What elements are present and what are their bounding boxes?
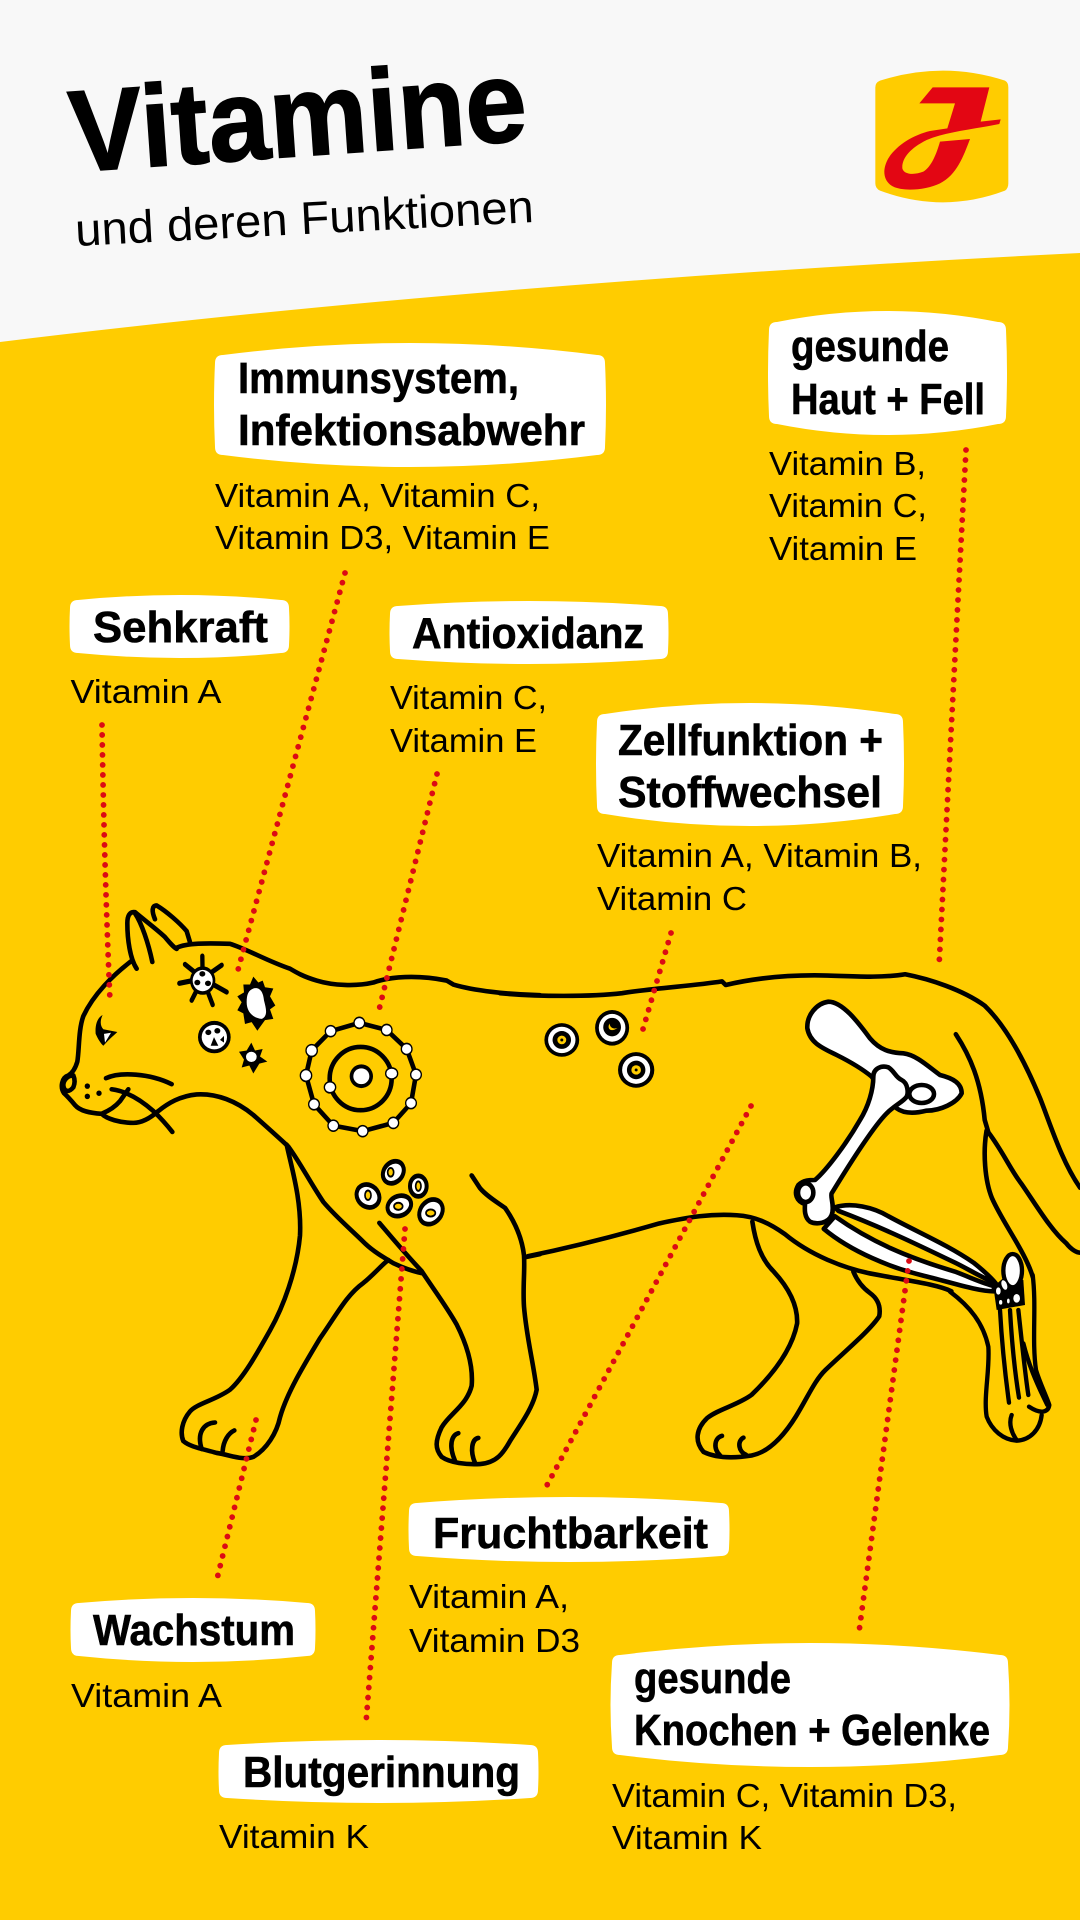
label: gesunde Haut + Fell	[768, 311, 1007, 435]
icon: lower leg bones	[824, 1205, 996, 1291]
label: Wachstum: Wachstum	[93, 1606, 295, 1655]
label: Fruchtbarkeit	[408, 1497, 730, 1562]
title: Vitamine	[65, 35, 531, 197]
icon: virus and bacteria	[179, 956, 275, 1073]
cat eye and whisker dots	[85, 1015, 117, 1099]
label: gesunde Knochen + Gelenke: gesunde	[634, 1654, 791, 1703]
label: Blutgerinnung: Blutgerinnung	[243, 1748, 520, 1797]
dotted connector lines	[102, 450, 966, 1723]
text: Zellfunktion vitamins: Vitamin C	[597, 880, 747, 917]
text: Haut vitamins	[769, 445, 927, 567]
cat illustration	[62, 905, 1080, 1464]
text: Antioxidanz vitamins: Vitamin C,	[390, 679, 547, 716]
icon: foot and paw	[950, 1254, 1049, 1441]
text: Fruchtbarkeit vitamins: Vitamin D3	[409, 1622, 580, 1659]
text: Knochen vitamins: Vitamin K	[612, 1819, 762, 1856]
label: gesunde Knochen + Gelenke	[610, 1643, 1010, 1767]
label: gesunde Haut + Fell: Haut + Fell	[791, 375, 985, 424]
text: Immunsystem vitamins: Vitamin D3, Vitamin E	[215, 519, 550, 556]
text: Zellfunktion vitamins: Vitamin A, Vitamin B,	[597, 837, 922, 874]
text: Sehkraft vitamins: Vitamin A	[70, 673, 222, 710]
text: Antioxidanz vitamins: Vitamin E	[390, 722, 537, 759]
text: Knochen vitamins: Vitamin C, Vitamin D3,	[612, 1777, 957, 1814]
icon: pelvis and femur	[796, 1002, 962, 1223]
label: Antioxidanz: Antioxidanz	[412, 609, 644, 658]
subtitle: und deren Funktionen	[74, 180, 535, 256]
icon: blood cells	[354, 1157, 447, 1229]
label: gesunde Knochen + Gelenke: Knochen + Gelenke	[634, 1706, 990, 1755]
label: Zellfunktion + Stoffwechsel: Stoffwechsel	[618, 768, 882, 817]
text: Immunsystem vitamins	[215, 477, 550, 556]
text: Haut vitamins: Vitamin C,	[769, 487, 927, 524]
label: gesunde Haut + Fell: gesunde	[791, 322, 949, 371]
label: Immunsystem	[214, 343, 606, 467]
label: Sehkraft	[70, 595, 290, 658]
text: Blutgerinnung vitamins: Vitamin K	[219, 1818, 369, 1855]
text: Haut vitamins: Vitamin B,	[769, 445, 926, 482]
text: Fruchtbarkeit vitamins: Vitamin A,	[409, 1578, 569, 1615]
text: Wachstum vitamins: Vitamin A	[71, 1677, 222, 1714]
label: Fruchtbarkeit: Fruchtbarkeit	[433, 1509, 708, 1558]
header background	[0, 0, 1080, 342]
label: Wachstum	[70, 1598, 316, 1662]
label: Immunsystem: Immunsystem,	[238, 354, 519, 403]
icon: large cell	[300, 1017, 421, 1137]
text: Antioxidanz vitamins	[390, 679, 547, 759]
cat rear half outline	[500, 974, 1080, 1457]
logo	[875, 71, 1008, 202]
cat front half outline	[62, 905, 540, 1464]
label: Antioxidanz	[390, 601, 668, 664]
label: Zellfunktion + Stoffwechsel: Zellfunktion +	[618, 716, 883, 765]
icon: cell nuclei	[544, 1010, 654, 1088]
text: Zellfunktion vitamins	[597, 837, 922, 917]
text: Fruchtbarkeit vitamins	[409, 1578, 580, 1659]
text: Knochen vitamins	[612, 1777, 957, 1856]
label: Sehkraft: Sehkraft	[93, 603, 268, 652]
label: Zellfunktion + Stoffwechsel	[596, 703, 904, 826]
label: Immunsystem: Infektionsabwehr	[238, 406, 585, 455]
text: Haut vitamins: Vitamin E	[769, 530, 917, 567]
text: Immunsystem vitamins: Vitamin A, Vitamin C,	[215, 477, 540, 514]
